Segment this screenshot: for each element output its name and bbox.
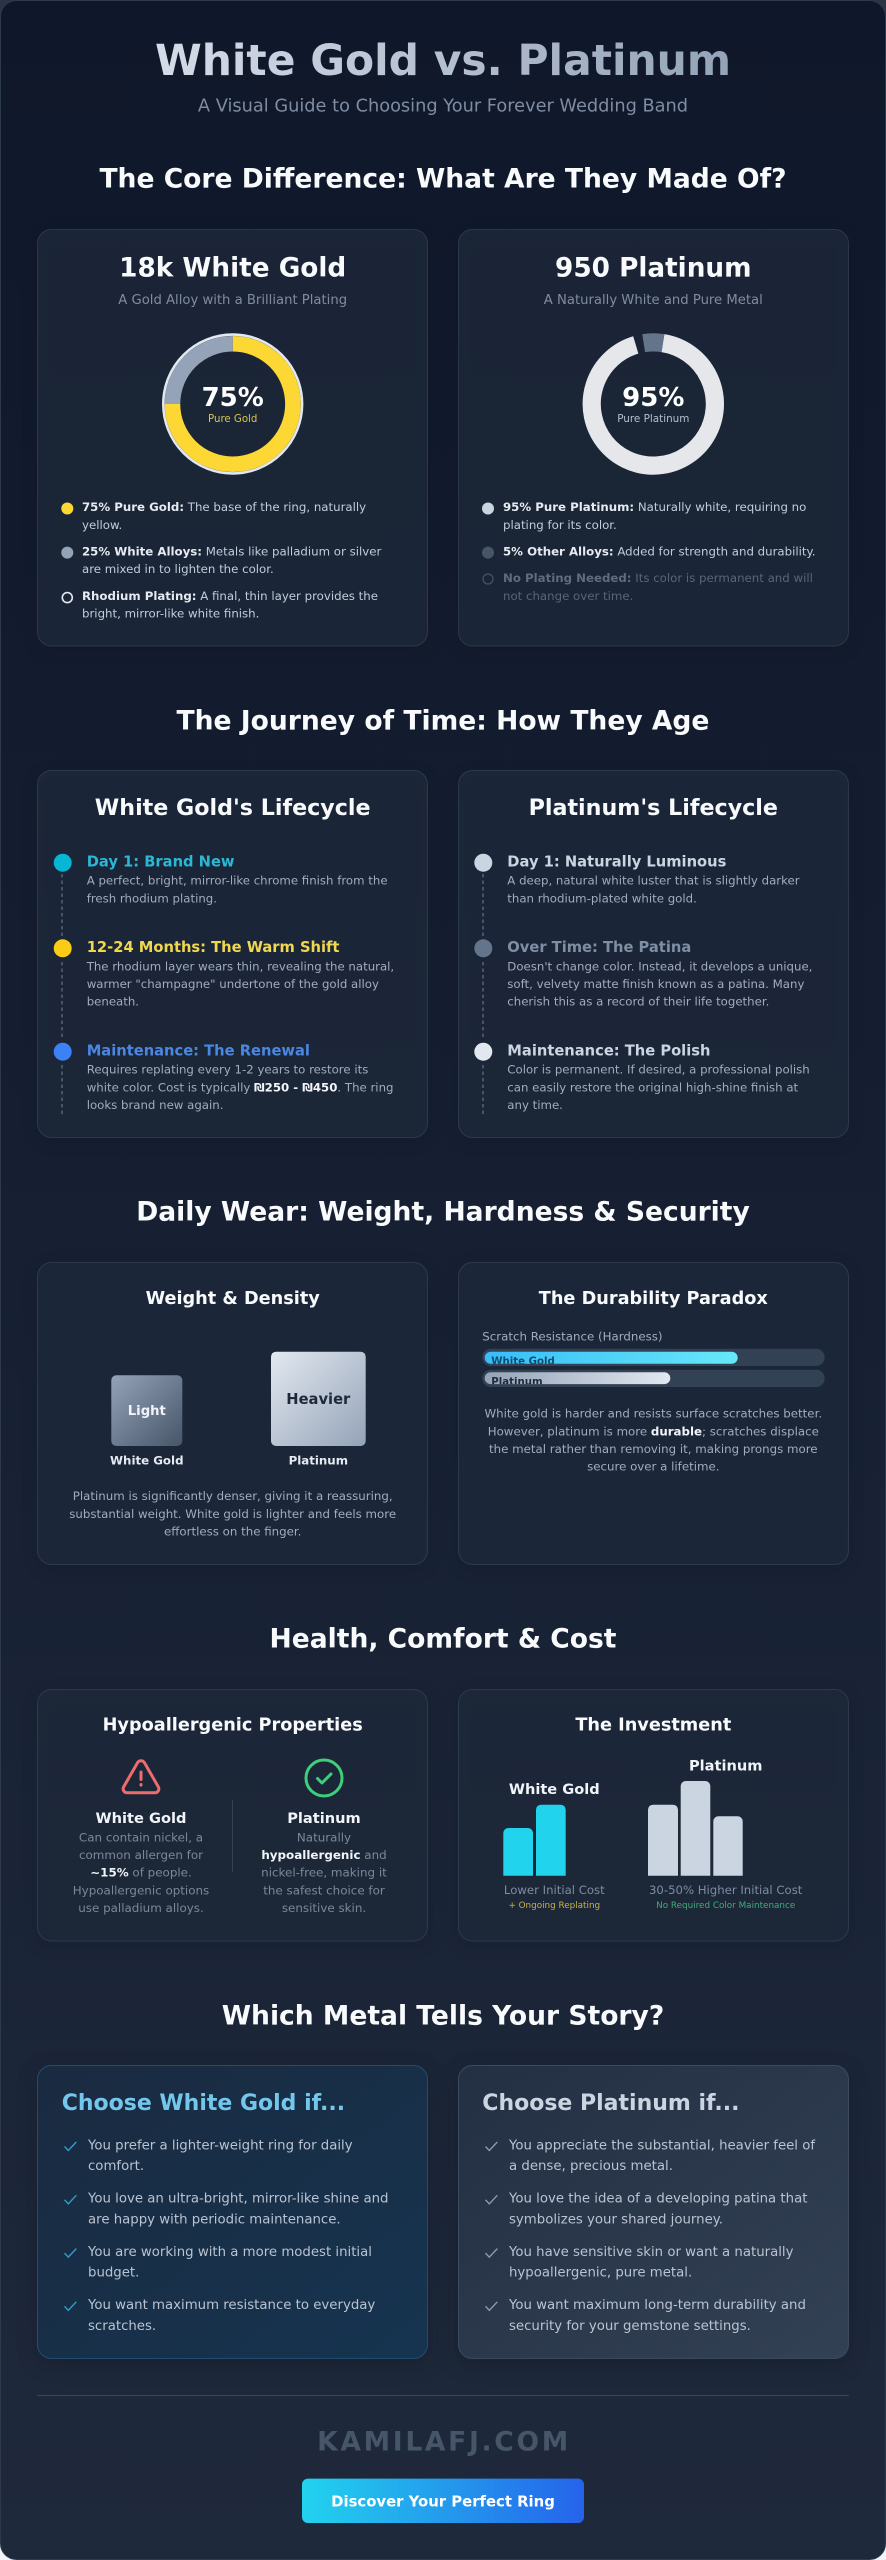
block: platinum heavier xyxy=(271,1352,366,1468)
legend: composition: 5% Other Alloys: Added for strength and durability. xyxy=(503,545,816,559)
timeline: warmer "champagne" undertone of the gold alloy xyxy=(87,977,379,991)
checklist: scratches. xyxy=(88,2319,156,2334)
panel: choose platinum xyxy=(458,2066,848,2358)
panel: the investment xyxy=(458,1690,848,1941)
donut chart: 95% platinum: Pure Platinum xyxy=(617,413,689,425)
panel: hypoallergenic properties xyxy=(38,1690,428,1941)
column: white gold allergy: Hypoallergenic options xyxy=(73,1883,209,1897)
bar label: Scratch Resistance (Hardness) xyxy=(482,1329,662,1343)
timeline: looks brand new again. xyxy=(87,1098,223,1112)
timeline: The rhodium layer wears thin, revealing the natural, xyxy=(86,959,394,973)
timeline: than rhodium-plated white gold. xyxy=(507,891,697,905)
panel: 18k white gold xyxy=(38,230,428,646)
heading: health comfort cost: Health, Comfort & Cost xyxy=(270,1624,617,1655)
panel title: The Investment xyxy=(575,1716,732,1736)
panel: white gold lifecycle xyxy=(38,770,428,1138)
bar chart: platinum cost xyxy=(648,1757,803,1911)
panel: durability paradox xyxy=(458,1262,848,1564)
description: effortless on the finger. xyxy=(164,1525,301,1539)
button: discover: Discover Your Perfect Ring xyxy=(331,2493,555,2511)
description: substantial weight. White gold is lighter and feels more xyxy=(69,1507,396,1521)
donut chart: 75% gold: Pure Gold xyxy=(208,414,257,425)
block: platinum heavier: Platinum xyxy=(289,1454,348,1468)
column: white gold allergy: Can contain nickel, a xyxy=(79,1830,203,1844)
block: white gold light: White Gold xyxy=(110,1454,184,1468)
timeline: Day 1: Naturally Luminous xyxy=(507,854,727,871)
bar: white gold xyxy=(482,1349,825,1367)
panel title: 18k White Gold xyxy=(119,254,346,284)
panel title: Hypoallergenic Properties xyxy=(103,1716,363,1736)
timeline xyxy=(54,854,394,1115)
icon: warning triangle xyxy=(123,1761,159,1793)
bar: platinum: Platinum xyxy=(491,1377,543,1388)
column: white gold allergy xyxy=(73,1810,209,1915)
bar chart: platinum cost: 30-50% Higher Initial Cost xyxy=(649,1883,803,1897)
checklist: are happy with periodic maintenance. xyxy=(88,2212,341,2227)
heading: daily wear: Daily Wear: Weight, Hardness & Security xyxy=(136,1197,750,1228)
description: However, platinum is more durable; scratches displace xyxy=(488,1424,819,1438)
timeline: A perfect, bright, mirror-like chrome finish from the xyxy=(87,874,388,888)
button: discover xyxy=(302,2479,584,2523)
block: platinum heavier: Heavier xyxy=(286,1391,351,1408)
column: white gold allergy: use palladium alloys. xyxy=(78,1901,204,1915)
legend: composition: not change over time. xyxy=(503,589,633,603)
timeline: cherish this as a record of their life together. xyxy=(507,995,769,1009)
bar chart: platinum cost: No Required Color Maintenance xyxy=(656,1901,795,1911)
checklist: You appreciate the substantial, heavier feel of xyxy=(508,2138,815,2153)
bar chart: white gold cost xyxy=(503,1781,605,1911)
panel: choose white gold xyxy=(38,2066,428,2358)
checklist: You love an ultra-bright, mirror-like shine and xyxy=(87,2192,388,2207)
title: White Gold vs. Platinum xyxy=(155,36,731,85)
timeline: A deep, natural white luster that is slightly darker xyxy=(507,874,800,888)
heading: which metal: Which Metal Tells Your Story? xyxy=(222,2000,664,2031)
panel title: Choose Platinum if... xyxy=(482,2091,739,2116)
checklist: You prefer a lighter-weight ring for daily xyxy=(87,2138,353,2153)
bar: white gold: White Gold xyxy=(491,1356,555,1367)
panel: 950 platinum xyxy=(458,230,848,646)
bar chart: white gold cost: White Gold xyxy=(509,1781,600,1798)
timeline: Color is permanent. If desired, a professional polish xyxy=(507,1063,810,1077)
description: Platinum is significantly denser, giving it a reassuring, xyxy=(73,1489,393,1503)
heading: journey of time: The Journey of Time: How They Age xyxy=(177,705,709,736)
checklist: a dense, precious metal. xyxy=(509,2159,673,2174)
timeline: Day 1: Brand New xyxy=(87,854,235,871)
description: White gold is harder and resists surface scratches better. xyxy=(484,1406,822,1420)
panel: platinum lifecycle xyxy=(458,770,848,1138)
column: platinum allergy xyxy=(261,1810,387,1915)
timeline: any time. xyxy=(507,1098,563,1112)
checklist: hypoallergenic, pure metal. xyxy=(509,2266,692,2281)
panel title: Choose White Gold if... xyxy=(62,2091,345,2116)
donut chart: 75% gold xyxy=(163,335,302,473)
bar: platinum xyxy=(482,1370,825,1388)
timeline: can easily restore the original high-shine finish at xyxy=(507,1080,799,1094)
timeline: Requires replating every 1-2 years to restore its xyxy=(87,1063,368,1077)
checklist: You have sensitive skin or want a naturally xyxy=(508,2245,794,2260)
legend: composition: bright, mirror-like white finish. xyxy=(82,606,259,620)
description xyxy=(69,1489,396,1539)
legend: composition: No Plating Needed: Its color is permanent and will xyxy=(503,571,813,585)
donut chart: 95% platinum xyxy=(592,342,715,466)
checklist: You want maximum resistance to everyday xyxy=(87,2298,375,2313)
bar chart: platinum cost: Platinum xyxy=(689,1757,762,1774)
panel subtitle: A Naturally White and Pure Metal xyxy=(544,293,763,308)
column: platinum allergy: Platinum xyxy=(287,1810,361,1827)
timeline: Over Time: The Patina xyxy=(507,939,691,956)
panel title: White Gold's Lifecycle xyxy=(95,795,371,821)
timeline: soft, velvety matte finish known as a patina. Many xyxy=(507,977,804,991)
panel title: 950 Platinum xyxy=(555,254,752,284)
brand name: KAMILAFJ.COM xyxy=(317,2426,571,2458)
column: platinum allergy: nickel-free, making it xyxy=(261,1866,387,1880)
timeline: Doesn't change color. Instead, it develops a unique, xyxy=(507,959,812,973)
checklist: budget. xyxy=(88,2266,139,2281)
column: platinum allergy: the safest choice for xyxy=(263,1883,385,1897)
checklist: You are working with a more modest initial xyxy=(87,2245,372,2260)
timeline: 12-24 Months: The Warm Shift xyxy=(87,939,339,956)
block: white gold light xyxy=(110,1375,184,1468)
column: platinum allergy: Naturally xyxy=(297,1830,351,1844)
timeline: white color. Cost is typically ₪250 - ₪450. The ring xyxy=(87,1080,393,1094)
block: white gold light: Light xyxy=(128,1404,166,1419)
legend: composition xyxy=(482,500,816,603)
column: white gold allergy: common allergen for xyxy=(79,1848,203,1862)
donut chart: 95% platinum: 95% xyxy=(622,383,684,413)
description xyxy=(484,1406,822,1474)
legend: composition: are mixed in to lighten the color. xyxy=(82,562,274,576)
legend: composition: plating for its color. xyxy=(503,518,617,532)
icon: check circle xyxy=(306,1760,342,1796)
legend: composition: 75% Pure Gold: The base of the ring, naturally xyxy=(82,500,366,514)
checklist xyxy=(486,2138,815,2334)
checklist: symbolizes your shared journey. xyxy=(509,2212,723,2227)
heading: core difference: The Core Difference: What Are They Made Of? xyxy=(99,163,787,194)
panel title: Weight & Density xyxy=(146,1289,320,1309)
checklist: comfort. xyxy=(88,2159,144,2174)
column: white gold allergy: White Gold xyxy=(96,1810,186,1827)
panel: weight and density xyxy=(38,1262,428,1564)
legend: composition: 25% White Alloys: Metals like palladium or silver xyxy=(82,545,381,559)
subtitle: A Visual Guide to Choosing Your Forever Wedding Band xyxy=(198,96,688,116)
timeline: Maintenance: The Polish xyxy=(507,1043,710,1060)
timeline xyxy=(474,854,812,1115)
panel title: Platinum's Lifecycle xyxy=(529,795,778,821)
description: secure over a lifetime. xyxy=(587,1460,719,1474)
checklist: security for your gemstone settings. xyxy=(509,2319,751,2334)
checklist xyxy=(64,2138,388,2334)
bar chart: white gold cost: + Ongoing Replating xyxy=(508,1901,600,1911)
checklist: You want maximum long-term durability and xyxy=(508,2298,806,2313)
timeline: fresh rhodium plating. xyxy=(87,891,217,905)
panel title: The Durability Paradox xyxy=(539,1289,768,1309)
bar chart: white gold cost: Lower Initial Cost xyxy=(504,1883,605,1897)
legend: composition xyxy=(61,500,381,620)
donut chart: 75% gold: 75% xyxy=(202,383,264,413)
timeline: Maintenance: The Renewal xyxy=(87,1043,310,1060)
legend: composition: Rhodium Plating: A final, thin layer provides the xyxy=(82,589,378,603)
legend: composition: yellow. xyxy=(82,518,122,532)
description: the metal rather than removing it, making prongs more xyxy=(489,1442,818,1456)
legend: composition: 95% Pure Platinum: Naturally white, requiring no xyxy=(503,500,806,514)
checklist: You love the idea of a developing patina that xyxy=(508,2192,807,2207)
column: white gold allergy: ~15% of people. xyxy=(90,1866,192,1880)
column: platinum allergy: hypoallergenic and xyxy=(261,1848,387,1862)
panel subtitle: A Gold Alloy with a Brilliant Plating xyxy=(118,293,347,308)
timeline: beneath. xyxy=(87,995,139,1009)
column: platinum allergy: sensitive skin. xyxy=(282,1901,366,1915)
